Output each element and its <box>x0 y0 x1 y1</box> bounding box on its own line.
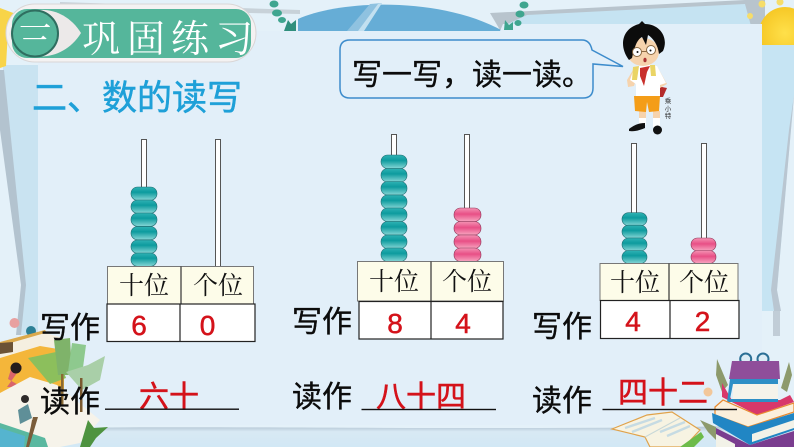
ones beads <box>691 238 716 264</box>
boy arms <box>627 68 667 88</box>
leaves <box>700 359 792 440</box>
boy name: 特 <box>665 111 672 120</box>
written answer cells <box>359 302 503 339</box>
written answer cells: 6 <box>131 310 147 341</box>
read label: 读作 <box>40 386 100 419</box>
read answer: 六十 <box>139 381 199 414</box>
place value header: 个位 <box>193 272 243 300</box>
place value header <box>600 264 738 300</box>
boy shirt <box>630 64 666 96</box>
bottom paper edge <box>0 425 794 447</box>
illustration: books and tree bottom left <box>0 318 108 447</box>
boy eyes and mouth <box>636 50 652 62</box>
place value header <box>358 262 504 301</box>
read answer: 八十四 <box>376 381 466 414</box>
boy shorts <box>634 96 660 112</box>
title text <box>82 19 253 61</box>
rods <box>142 140 220 266</box>
orange book <box>715 400 794 427</box>
title number circle <box>12 10 58 60</box>
abacus 2: eighty-four <box>292 134 504 414</box>
written answer cells: 2 <box>695 306 710 337</box>
boy straps and scarf <box>632 65 656 80</box>
right paper strip <box>762 45 794 336</box>
place value header: 十位 <box>369 268 419 296</box>
written answer cells: 4 <box>625 306 641 337</box>
title text: 习 <box>215 19 253 61</box>
speech bubble: 写一写，读一读。 <box>352 59 592 92</box>
icon: sun top left <box>0 8 16 68</box>
character: boy <box>623 21 672 134</box>
write label: 写作 <box>40 312 100 345</box>
place value header <box>108 266 254 304</box>
red book <box>722 383 794 415</box>
place value header: 个位 <box>442 268 492 296</box>
boy name: 乘 <box>665 96 672 105</box>
purple book <box>729 361 780 379</box>
boy name: 小 <box>665 104 672 113</box>
written answer cells: 0 <box>200 310 215 341</box>
title text: 练 <box>171 19 211 61</box>
blue white book <box>727 379 778 402</box>
abacus 3: forty-two <box>532 144 739 418</box>
read answer: 四十二 <box>618 377 708 410</box>
heading: 二、数的读写 <box>32 79 242 118</box>
illustration: open book <box>612 412 704 447</box>
tens beads <box>381 155 407 262</box>
read label: 读作 <box>532 385 592 418</box>
icon: sun top right <box>747 0 794 59</box>
flower <box>704 388 712 396</box>
blue book <box>712 413 794 445</box>
place value header: 个位 <box>679 269 729 297</box>
bottom book <box>716 428 794 447</box>
boy legs <box>629 111 662 134</box>
write label: 写作 <box>292 306 352 339</box>
read label: 读作 <box>292 381 352 414</box>
place value header: 十位 <box>610 269 660 297</box>
title eye badge <box>9 10 81 56</box>
title banner <box>6 4 256 62</box>
write label: 写作 <box>532 311 592 344</box>
speech bubble <box>340 40 623 98</box>
place value header: 十位 <box>119 272 169 300</box>
abacus 1: sixty <box>40 140 255 419</box>
boy glasses <box>632 46 656 56</box>
tens beads <box>131 187 157 266</box>
illustration: stack of books <box>700 354 794 447</box>
title number circle: 三 <box>17 20 53 60</box>
icon: vines <box>270 0 528 31</box>
written answer cells <box>600 300 739 338</box>
title text: 固 <box>127 19 165 61</box>
boy hair <box>623 21 665 60</box>
written answer cells: 8 <box>387 308 403 339</box>
title text: 巩 <box>82 19 120 61</box>
rods <box>632 144 706 264</box>
boy backpack <box>657 86 667 97</box>
boy head <box>627 38 659 66</box>
tens beads <box>622 213 647 264</box>
ones beads <box>454 208 481 262</box>
boy name <box>665 96 672 120</box>
written answer cells: 4 <box>455 308 471 339</box>
glasses <box>740 354 768 364</box>
rods <box>392 134 470 262</box>
written answer cells <box>107 304 255 342</box>
